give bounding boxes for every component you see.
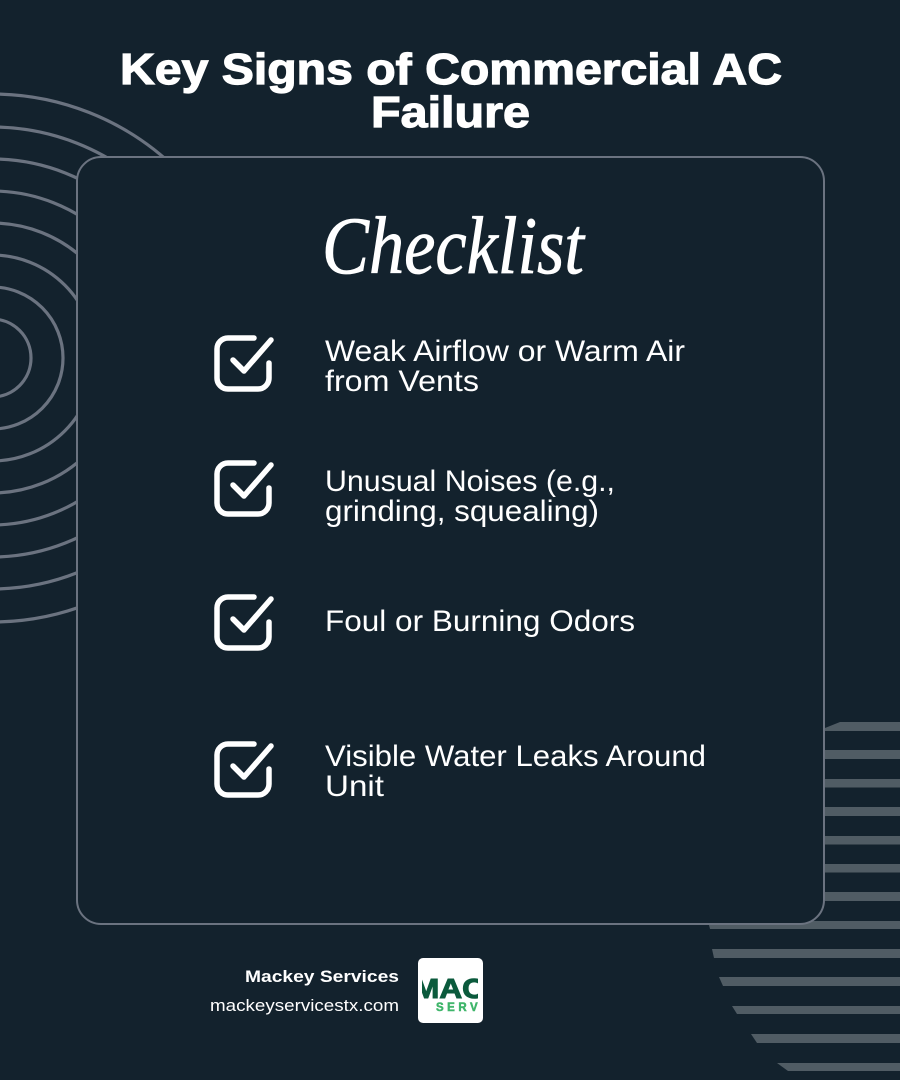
item: water leaks [217,740,706,803]
logo: SERV [436,1002,481,1014]
icon: checkbox [217,597,271,648]
item: weak airflow: Weak Airflow or Warm Air [325,335,685,368]
item: weak airflow: from Vents [325,365,479,398]
item: water leaks: Unit [325,770,385,803]
heading: Checklist: Checklist [322,200,586,291]
item: foul odors: Foul or Burning Odors [325,605,635,638]
title: Failure [371,88,530,137]
item: unusual noises [217,463,615,528]
icon: checkbox [217,744,271,795]
icon: checkbox [217,463,271,514]
concentric rings decoration [0,94,256,622]
footer: brand name and url: Mackey Services [245,967,399,986]
item: unusual noises: grinding, squealing) [325,495,599,528]
icon: checkbox [217,338,271,389]
title: Key Signs of Commercial AC [120,45,782,94]
logo [413,958,485,1023]
footer: brand name and url [210,967,399,1015]
title [120,45,782,137]
item: weak airflow [217,335,685,398]
item: unusual noises: Unusual Noises (e.g., [325,465,615,498]
footer: brand name and url: mackeyservicestx.com [210,996,399,1015]
item: foul odors [217,597,635,648]
logo: MAC [413,973,485,1004]
panel: checklist [77,157,824,924]
item: water leaks: Visible Water Leaks Around [325,740,706,773]
striped half circle decoration [708,722,900,1071]
